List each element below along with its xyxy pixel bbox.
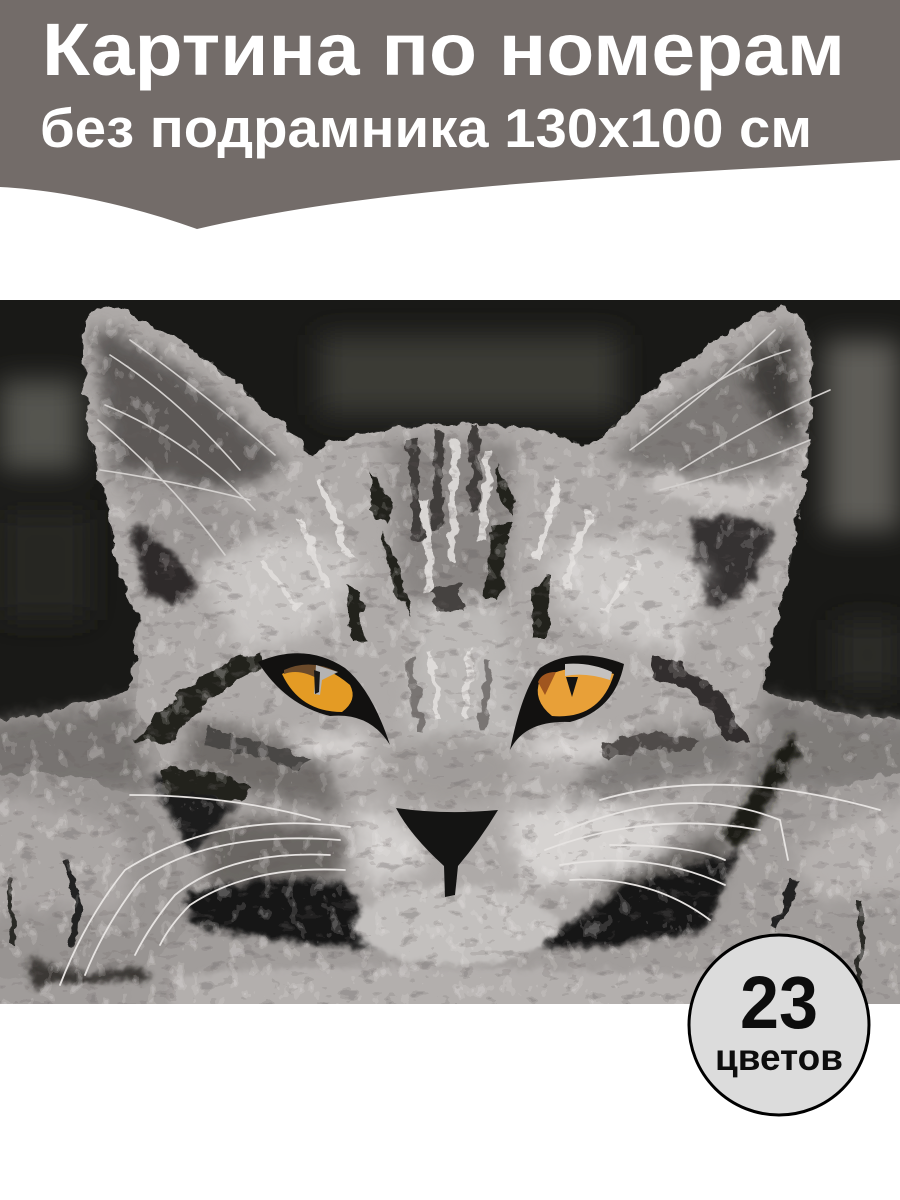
badge: 23 colours	[689, 935, 869, 1115]
ears	[95, 325, 800, 610]
ear hairs	[98, 330, 830, 555]
painterly colour patches	[0, 306, 900, 1050]
title: Картина по номерам	[42, 8, 845, 91]
subtitle: без подрамника 130х100 см	[40, 97, 812, 159]
head base	[84, 306, 811, 965]
dark background	[0, 300, 900, 722]
left eye	[258, 653, 390, 745]
painting: kitten portrait	[0, 300, 900, 1050]
badge number: 23	[740, 961, 818, 1044]
paws	[0, 770, 900, 1030]
cat fur	[0, 306, 900, 1050]
nose	[396, 808, 498, 897]
badge label: цветов	[715, 1037, 843, 1078]
cheek shadow	[150, 730, 800, 950]
floor	[168, 962, 706, 1004]
whiskers	[60, 785, 880, 985]
shoulders	[0, 695, 900, 790]
chin	[353, 885, 557, 965]
right eye	[510, 655, 624, 750]
header banner	[0, 0, 900, 229]
light face areas	[180, 440, 745, 920]
tabby stripes	[135, 465, 748, 802]
